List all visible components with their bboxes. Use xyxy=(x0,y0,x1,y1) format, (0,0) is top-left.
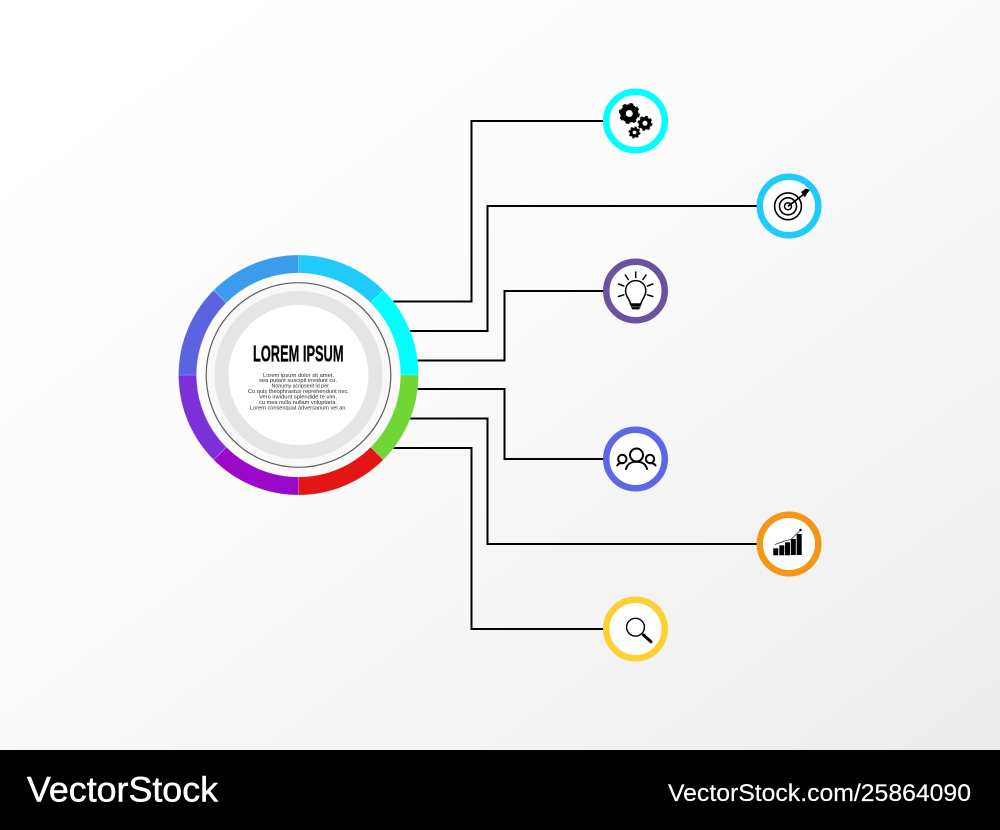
segment: red xyxy=(298,447,383,495)
hub body text: cu mea nulla nullam voluptaria. xyxy=(259,400,337,406)
segment: sky blue xyxy=(298,255,383,303)
node: gears xyxy=(606,92,665,150)
segment: cyan xyxy=(371,290,418,375)
hub body text: Cu quis theophrastus reprehendunt nec. xyxy=(248,389,349,395)
central hub xyxy=(178,255,418,495)
footer url: VectorStock.com/25864090 xyxy=(668,780,971,807)
thin outline ring xyxy=(206,283,391,467)
segment: indigo xyxy=(178,290,226,375)
icon: people group xyxy=(617,448,656,469)
connector lines xyxy=(393,121,758,629)
hub body text xyxy=(248,373,349,411)
hub body text: Lorem ipsum dolor sit amet, xyxy=(263,373,334,379)
footer logo: VectorStock xyxy=(27,771,219,810)
connector: team xyxy=(417,389,605,459)
node: target xyxy=(760,177,818,235)
segment: violet xyxy=(178,375,226,460)
node: idea xyxy=(606,262,665,320)
grey inner ring xyxy=(222,298,376,452)
node: growth xyxy=(760,515,818,573)
connector: growth xyxy=(410,418,758,544)
connector: idea xyxy=(417,291,605,360)
segment: blue xyxy=(214,255,298,303)
node: search xyxy=(606,600,665,658)
hub body text: Vero invidunt splendide te vim, xyxy=(259,394,337,400)
icon: gears xyxy=(620,104,652,138)
icon: bar chart xyxy=(773,529,802,555)
connector: search xyxy=(393,448,605,629)
hub body text: Nonumy scripserit id per. xyxy=(272,384,330,390)
icon: magnifying glass xyxy=(627,618,651,642)
node: team xyxy=(606,430,665,488)
icon: light bulb xyxy=(618,272,653,309)
segment: purple xyxy=(214,447,298,495)
segment: green xyxy=(371,375,418,460)
segmented colour ring xyxy=(178,255,418,495)
icon: target with arrow xyxy=(775,188,810,220)
hub body text: Lorem consenquat adversarium vel an. xyxy=(250,405,347,411)
hub title: LOREM IPSUM xyxy=(253,340,344,366)
connector: gears xyxy=(393,121,605,302)
footer bar xyxy=(0,750,1000,830)
hub body text: sea putant suscipit invidunt cu. xyxy=(259,378,337,384)
connector: target xyxy=(410,206,758,331)
